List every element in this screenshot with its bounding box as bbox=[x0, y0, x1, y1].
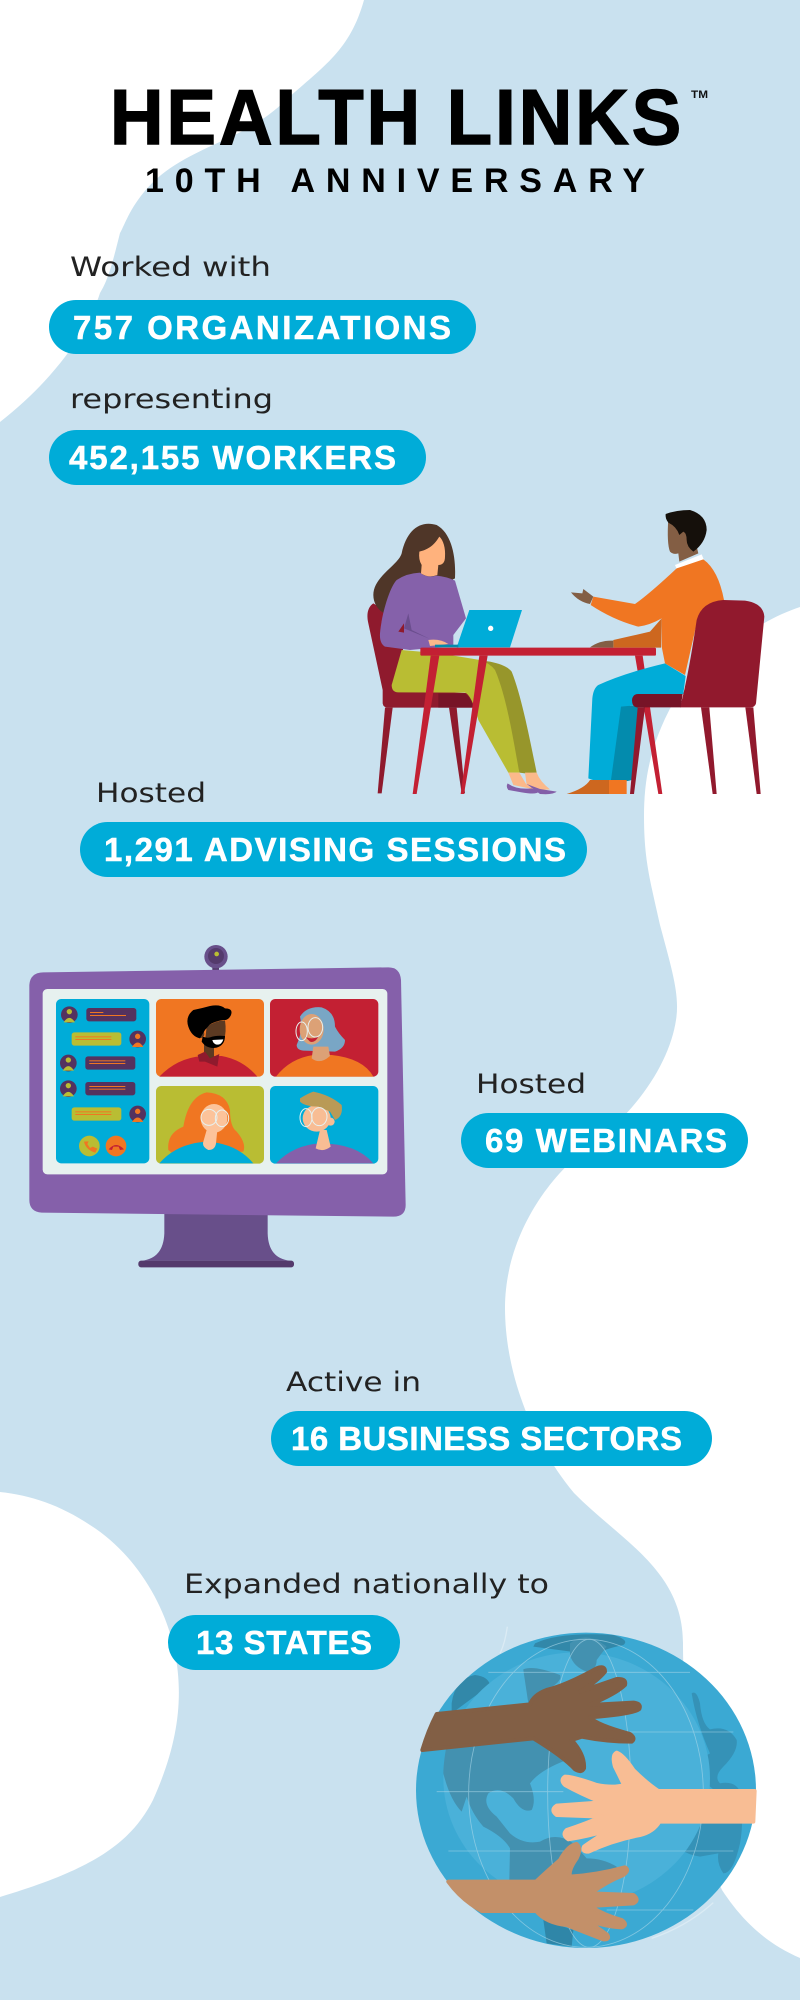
stat pill: 13 states: 13 STATES bbox=[196, 1624, 372, 1661]
illustration: globe with reaching hands bbox=[416, 1627, 756, 1948]
stat pill: 16 business sectors: 16 BUSINESS SECTORS bbox=[291, 1420, 682, 1457]
laptop bbox=[435, 610, 522, 647]
stat pill: 757 organizations: 757 ORGANIZATIONS bbox=[73, 309, 451, 346]
stat pill: 1,291 advising sessions bbox=[80, 822, 587, 877]
table bbox=[413, 648, 662, 794]
video tile: woman with red hair bbox=[156, 1086, 264, 1164]
woman's hair bbox=[373, 524, 455, 613]
stat label: expanded nationally: Expanded nationally to bbox=[184, 1569, 549, 1600]
stat pill: 452,155 workers bbox=[49, 430, 426, 485]
video tile: man with beard bbox=[156, 999, 264, 1077]
woman's chair bbox=[367, 603, 473, 793]
stat pill: 1,291 advising sessions: 1,291 ADVISING SESSIONS bbox=[104, 831, 566, 868]
illustration: video call on a monitor bbox=[29, 945, 406, 1267]
stat pill: 16 business sectors bbox=[271, 1411, 712, 1466]
title: TM bbox=[691, 89, 708, 101]
man's chair bbox=[630, 600, 764, 794]
woman's legs bbox=[392, 650, 557, 794]
stat pill: 757 organizations bbox=[49, 300, 476, 354]
stat pill: 452,155 workers: 452,155 WORKERS bbox=[69, 439, 396, 476]
illustration: two people meeting at a table bbox=[367, 510, 764, 794]
woman's torso and head bbox=[380, 537, 466, 650]
stat label: representing: representing bbox=[70, 384, 273, 415]
stat label: worked with: Worked with bbox=[70, 252, 271, 283]
subtitle: 10TH ANNIVERSARY bbox=[145, 162, 645, 200]
stat pill: 69 webinars: 69 WEBINARS bbox=[485, 1122, 727, 1159]
stat label: active in: Active in bbox=[286, 1367, 421, 1398]
monitor screen bbox=[43, 989, 387, 1174]
stat label: hosted advising: Hosted bbox=[96, 778, 206, 809]
hand: dark brown bbox=[422, 1667, 640, 1771]
monitor body bbox=[29, 967, 406, 1217]
monitor stand bbox=[138, 1213, 294, 1267]
globe bbox=[416, 1627, 756, 1948]
man bbox=[567, 510, 724, 794]
stat label: hosted webinars: Hosted bbox=[476, 1069, 586, 1100]
chat panel bbox=[56, 999, 149, 1163]
title: HEALTH LINKS bbox=[110, 74, 684, 161]
webcam bbox=[204, 945, 228, 972]
video tile: woman with blue hair bbox=[270, 999, 378, 1077]
stat pill: 13 states bbox=[168, 1615, 400, 1670]
stat pill: 69 webinars bbox=[461, 1113, 748, 1168]
hand: tan bbox=[448, 1844, 637, 1939]
hand: peach bbox=[553, 1753, 755, 1852]
video tile: person with blond hair bbox=[270, 1086, 378, 1164]
